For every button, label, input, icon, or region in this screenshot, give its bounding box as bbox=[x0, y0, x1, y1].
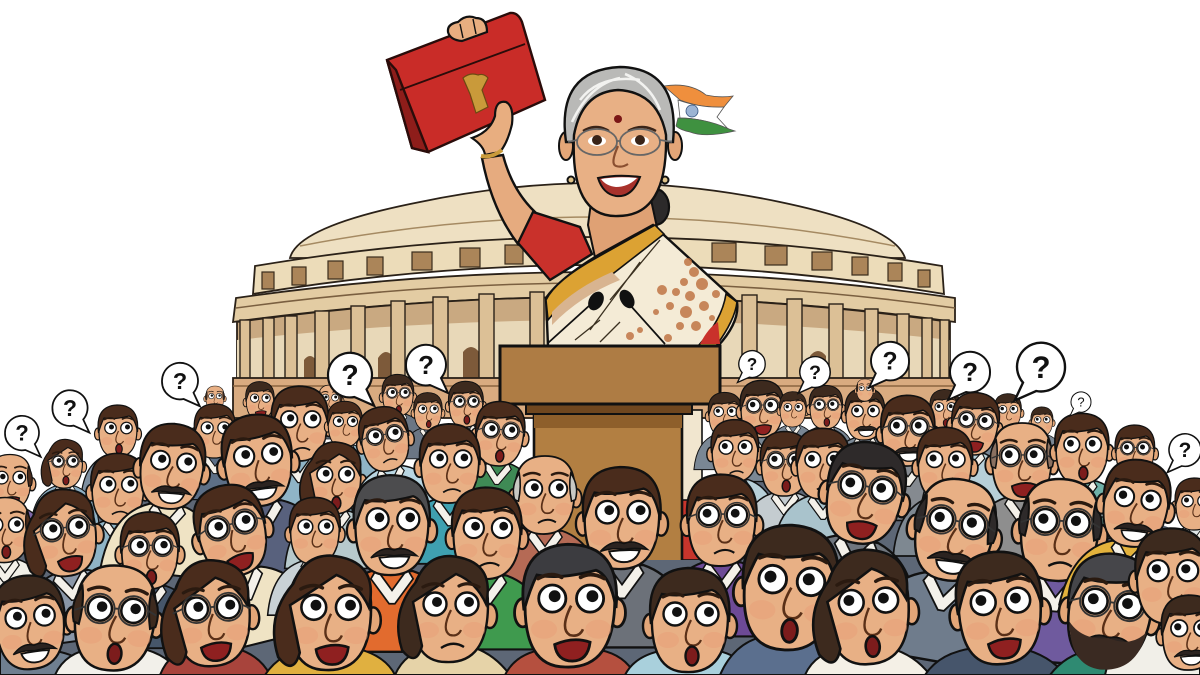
saree folds bbox=[575, 240, 660, 342]
question bubble bbox=[869, 342, 909, 388]
person bbox=[657, 474, 787, 636]
lower hand bbox=[472, 102, 512, 155]
person bbox=[101, 418, 237, 580]
crowd shadow base bbox=[0, 470, 1200, 675]
question bubble: ? bbox=[63, 395, 77, 421]
person bbox=[233, 382, 287, 448]
person bbox=[730, 521, 851, 654]
person bbox=[808, 546, 922, 668]
person bbox=[1129, 528, 1200, 624]
question bubble: ? bbox=[747, 354, 757, 374]
podium bbox=[500, 346, 720, 570]
person bbox=[274, 556, 381, 670]
question bubble bbox=[52, 390, 89, 433]
question bubble: ? bbox=[418, 350, 434, 380]
person bbox=[721, 380, 803, 482]
raised arm bbox=[482, 155, 535, 244]
person bbox=[433, 381, 499, 462]
person bbox=[177, 404, 253, 500]
person bbox=[1052, 547, 1168, 675]
saree bbox=[546, 225, 737, 346]
person bbox=[449, 398, 548, 519]
person bbox=[285, 442, 385, 568]
person bbox=[312, 401, 378, 482]
red blouse bbox=[518, 212, 592, 280]
person bbox=[321, 475, 463, 652]
person bbox=[422, 487, 552, 649]
blouse at waist bbox=[700, 322, 720, 344]
person bbox=[368, 374, 428, 448]
person bbox=[0, 481, 140, 649]
question bubble: ? bbox=[341, 360, 359, 392]
person bbox=[0, 498, 53, 614]
person bbox=[156, 557, 262, 670]
person bbox=[1021, 407, 1063, 458]
person bbox=[81, 405, 155, 497]
question bubble bbox=[1015, 343, 1065, 401]
question bubble: ? bbox=[809, 362, 821, 384]
person bbox=[308, 385, 352, 439]
person bbox=[983, 394, 1033, 456]
person bbox=[31, 439, 99, 525]
question bubble: ? bbox=[1179, 439, 1191, 462]
question bubble: ? bbox=[1077, 394, 1085, 410]
person bbox=[247, 386, 353, 519]
neck bbox=[588, 195, 658, 262]
person bbox=[1156, 595, 1200, 670]
person bbox=[945, 548, 1054, 667]
presenter figure bbox=[387, 13, 737, 346]
person bbox=[1158, 478, 1200, 570]
question bubble bbox=[162, 363, 200, 406]
person bbox=[694, 392, 756, 470]
crowd: front row clothing bbox=[0, 620, 1200, 675]
question bubble: ? bbox=[1031, 350, 1051, 385]
person bbox=[394, 424, 506, 564]
person bbox=[0, 571, 77, 673]
person bbox=[643, 568, 737, 672]
person bbox=[401, 393, 455, 459]
person bbox=[855, 379, 875, 401]
hair bun bbox=[641, 189, 669, 225]
question bubble bbox=[328, 353, 374, 406]
eyes and glasses bbox=[568, 127, 672, 167]
crowd: middle row bbox=[0, 399, 1200, 596]
question bubble bbox=[406, 345, 448, 393]
person bbox=[68, 453, 168, 578]
flag bbox=[664, 85, 735, 135]
person bbox=[739, 432, 831, 546]
face bbox=[574, 90, 666, 216]
person bbox=[771, 430, 946, 633]
person bbox=[1059, 451, 1200, 622]
question bubble bbox=[737, 351, 765, 382]
bindi bbox=[614, 115, 622, 123]
parliament building bbox=[233, 183, 955, 418]
crowd: front row bbox=[0, 521, 1200, 675]
question bubble bbox=[798, 357, 830, 393]
person bbox=[1098, 425, 1172, 517]
bangle bbox=[481, 150, 502, 156]
question bubble: ? bbox=[962, 357, 978, 387]
upper hand bbox=[448, 17, 487, 41]
briefcase bbox=[387, 13, 545, 152]
saree floral print bbox=[626, 258, 720, 342]
question bubble: ? bbox=[15, 421, 29, 446]
person bbox=[334, 399, 444, 527]
person bbox=[768, 392, 818, 454]
person bbox=[795, 385, 857, 463]
silver hair bbox=[565, 67, 674, 142]
person bbox=[923, 388, 1023, 507]
person bbox=[858, 467, 1038, 674]
person bbox=[487, 456, 603, 596]
question bubble bbox=[1070, 392, 1091, 416]
person bbox=[398, 556, 497, 662]
person bbox=[157, 470, 323, 659]
question bubble: ? bbox=[882, 349, 898, 376]
person bbox=[828, 388, 902, 480]
crowd: back row bbox=[31, 374, 1063, 525]
crowd: lower middle row bbox=[0, 430, 1200, 674]
saree gold border bbox=[546, 225, 664, 320]
person bbox=[197, 386, 233, 429]
saree strip beside podium bbox=[678, 410, 702, 560]
person bbox=[188, 408, 335, 583]
person bbox=[893, 427, 997, 556]
person bbox=[268, 497, 362, 615]
person bbox=[515, 544, 625, 667]
ears and earrings bbox=[559, 132, 682, 184]
person bbox=[549, 467, 695, 647]
person bbox=[1032, 413, 1132, 538]
person bbox=[917, 389, 973, 459]
question bubbles bbox=[5, 342, 1200, 472]
person bbox=[975, 474, 1139, 668]
person bbox=[964, 423, 1080, 563]
question bubble bbox=[948, 352, 990, 400]
person bbox=[62, 562, 168, 674]
question bubble bbox=[1167, 434, 1200, 472]
person bbox=[858, 395, 958, 520]
question bubble: ? bbox=[173, 368, 187, 394]
microphones bbox=[548, 287, 665, 344]
person bbox=[691, 420, 779, 530]
person bbox=[0, 454, 51, 554]
smile bbox=[598, 176, 640, 196]
question bubble bbox=[5, 416, 41, 457]
person bbox=[773, 428, 873, 553]
person bbox=[95, 512, 205, 648]
